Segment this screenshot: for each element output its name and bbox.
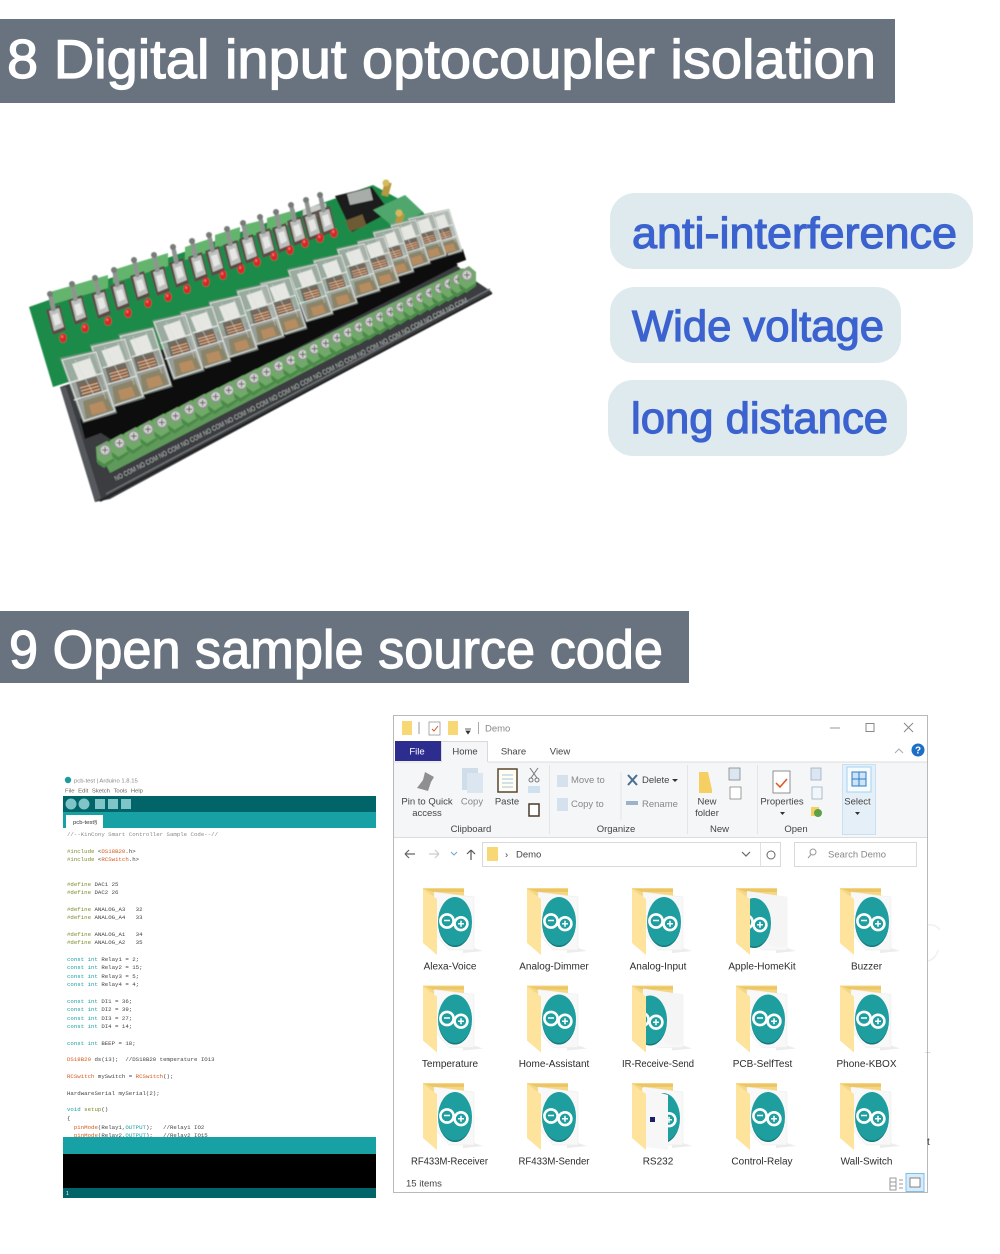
sample source code: DS18B20 ds(13); //DS18B20 temperature IO13	[67, 1056, 215, 1063]
stray marks right of window: ...	[925, 1048, 931, 1055]
ribbon: Clipboard group: Copy	[461, 796, 483, 808]
folder: RF433M-Sender: RF433M-Sender	[518, 1156, 590, 1168]
navigation and address bar: ›	[505, 850, 508, 860]
IDE title and menu	[65, 777, 144, 794]
folder: Home-Assistant: Home-Assistant	[519, 1059, 590, 1070]
folder: Apple-HomeKit	[728, 888, 796, 972]
folder: Home-Assistant	[519, 986, 590, 1070]
explorer title bar	[402, 721, 913, 735]
folder: IR-Receive-Send: IR-Receive-Send	[622, 1059, 694, 1070]
ribbon: New group: New	[697, 796, 717, 808]
folder: Buzzer	[840, 888, 900, 972]
ribbon: New group: folder	[695, 808, 719, 819]
sample source code: HardwareSerial mySerial(2);	[67, 1090, 160, 1097]
navigation and address bar	[405, 842, 916, 866]
folder: Control-Relay	[731, 1083, 796, 1168]
rail terminal labels: NO COM NO COM NO COM NO COM NO COM NO COM NO COM NO COM NO COM NO COM NO COM NO COM NO COM NO COM NO COM NO COM	[114, 297, 469, 483]
folder: Analog-Dimmer: Analog-Dimmer	[519, 962, 589, 972]
folder: Analog-Input	[630, 888, 692, 972]
folder: RF433M-Receiver	[411, 1083, 489, 1168]
ribbon: Organize group: Delete	[642, 775, 669, 786]
relays	[60, 209, 466, 439]
sample source code: const int DI1 = 36;	[67, 998, 132, 1005]
toggle switches	[46, 192, 336, 335]
sample source code: const int DI2 = 39;	[67, 1006, 132, 1013]
stray marks right of window	[925, 925, 940, 1148]
IDE console	[63, 1137, 376, 1198]
folder: Phone-KBOX: Phone-KBOX	[836, 1059, 897, 1070]
folder: Apple-HomeKit: Apple-HomeKit	[728, 962, 796, 972]
ribbon tabs: Share	[501, 746, 526, 758]
sample source code: const int Relay2 = 15;	[67, 964, 143, 971]
ribbon: Organize group: Rename	[642, 799, 678, 810]
sample source code: #include <RCSwitch.h>	[67, 856, 140, 863]
navigation and address bar: Search Demo	[828, 850, 886, 860]
sample source code: const int DI4 = 14;	[67, 1023, 132, 1030]
sample source code: //--KinCony Smart Controller Sample Code--//	[67, 831, 219, 838]
folder: PCB-SelfTest	[733, 986, 796, 1070]
ribbon: Organize group: Organize	[597, 824, 635, 835]
folder: Control-Relay: Control-Relay	[731, 1156, 793, 1168]
folder: RF433M-Receiver: RF433M-Receiver	[411, 1156, 489, 1168]
navigation and address bar: Demo	[516, 850, 541, 860]
sample source code: #define DAC2 26	[67, 889, 119, 896]
folder: Alexa-Voice: Alexa-Voice	[424, 962, 477, 972]
feature tag: wide voltage	[610, 287, 901, 363]
sample source code: #define ANALOG_A4 33	[67, 914, 143, 921]
sample source code: #define DAC1 25	[67, 881, 119, 888]
DIN rail base	[60, 260, 492, 502]
ribbon tabs: Home	[452, 746, 478, 758]
sample source code: #include <DS18B20.h>	[67, 848, 136, 855]
explorer title bar: Demo	[485, 724, 510, 734]
feature tag: long distance	[608, 380, 907, 456]
sample source code: pinMode(Relay1,OUTPUT); //Relay1 IO2	[67, 1124, 205, 1131]
IDE title and menu: File Edit Sketch Tools Help	[65, 788, 144, 794]
ribbon: Clipboard group: access	[412, 808, 442, 819]
ribbon: Open group	[760, 768, 822, 835]
folder: Temperature: Temperature	[422, 1059, 479, 1070]
ribbon: Organize group	[557, 775, 678, 835]
sample source code: const int Relay4 = 4;	[67, 981, 139, 988]
stray marks right of window: t	[927, 1137, 930, 1148]
ribbon: New group: New	[710, 824, 729, 835]
sample source code: pinMode(Relay2,OUTPUT); //Relay2 IO15	[67, 1132, 208, 1139]
panel: Arduino IDE screenshot	[63, 777, 376, 1198]
product photo: relay controller board	[29, 180, 492, 502]
folder: RS232: RS232	[643, 1156, 674, 1168]
sample source code: const int Relay1 = 2;	[67, 956, 139, 963]
ribbon tabs: File	[409, 746, 425, 758]
terminal strip	[96, 266, 476, 473]
heading: section 8: 8 Digital input optocoupler isolation	[7, 28, 876, 90]
folder: RF433M-Sender	[518, 1083, 590, 1168]
feature tag: long distance: long distance	[631, 394, 888, 443]
network and power connectors	[335, 180, 423, 232]
folder: IR-Receive-Send	[622, 986, 694, 1070]
folder: Analog-Dimmer	[519, 888, 589, 972]
ribbon: Open group: Properties	[760, 796, 804, 808]
folder: Analog-Input: Analog-Input	[630, 962, 687, 972]
green circuit board	[29, 185, 453, 387]
IDE title and menu: pcb-test | Arduino 1.8.15	[74, 778, 138, 784]
ribbon: New group	[695, 768, 741, 835]
ribbon: Organize group: Copy to	[571, 799, 604, 810]
sample source code: {	[67, 1115, 70, 1122]
sample source code: #define ANALOG_A3 32	[67, 906, 143, 913]
folder: PCB-SelfTest: PCB-SelfTest	[733, 1059, 792, 1070]
panel: file explorer window	[394, 716, 928, 1192]
ribbon: Organize group: Move to	[571, 775, 605, 786]
IDE toolbar	[63, 796, 376, 828]
feature tag: anti-interference	[610, 193, 973, 269]
sample source code: const int Relay3 = 5;	[67, 973, 139, 980]
ribbon: Clipboard group	[401, 768, 540, 835]
red LEDs	[59, 228, 338, 343]
feature tag: wide voltage: Wide voltage	[632, 302, 884, 351]
folder: Buzzer: Buzzer	[851, 962, 883, 972]
folder: Temperature	[422, 986, 483, 1070]
heading: section 9: 9 Open sample source code	[9, 620, 663, 680]
IDE toolbar: pcb-test§	[73, 820, 97, 826]
sample source code: RCSwitch mySwitch = RCSwitch();	[67, 1073, 173, 1080]
folder: Phone-KBOX	[836, 986, 900, 1070]
ribbon: Select group	[842, 764, 876, 834]
ribbon body	[394, 762, 927, 838]
status bar: 15 items	[406, 1178, 442, 1190]
IDE console: 1	[66, 1191, 69, 1197]
sample source code: #define ANALOG_A1 34	[67, 931, 143, 938]
sample source code: const int DI3 = 27;	[67, 1015, 132, 1022]
ribbon tabs: ?	[915, 746, 921, 756]
ribbon: Clipboard group: Pin to Quick	[401, 796, 453, 808]
folder: Wall-Switch: Wall-Switch	[841, 1156, 892, 1168]
sample source code: const int BEEP = 18;	[67, 1040, 136, 1047]
sample source code: #define ANALOG_A2 35	[67, 939, 143, 946]
sample source code	[67, 831, 219, 1139]
ribbon: Select group: Select	[844, 796, 871, 808]
ribbon: Open group: Open	[784, 824, 808, 835]
black relay sockets strip	[85, 258, 458, 442]
green input connectors	[50, 203, 326, 305]
sample source code: void setup()	[67, 1106, 108, 1113]
folder: Wall-Switch	[840, 1083, 900, 1168]
ribbon: Clipboard group: Paste	[495, 796, 519, 808]
ribbon tabs	[395, 741, 924, 762]
ribbon: Clipboard group: Clipboard	[451, 824, 491, 835]
status bar	[406, 1174, 924, 1192]
folder: RS232	[632, 1083, 692, 1168]
feature tag: anti-interference: anti-interference	[632, 209, 957, 258]
folder: Alexa-Voice	[423, 888, 483, 972]
ribbon tabs: View	[550, 746, 570, 758]
